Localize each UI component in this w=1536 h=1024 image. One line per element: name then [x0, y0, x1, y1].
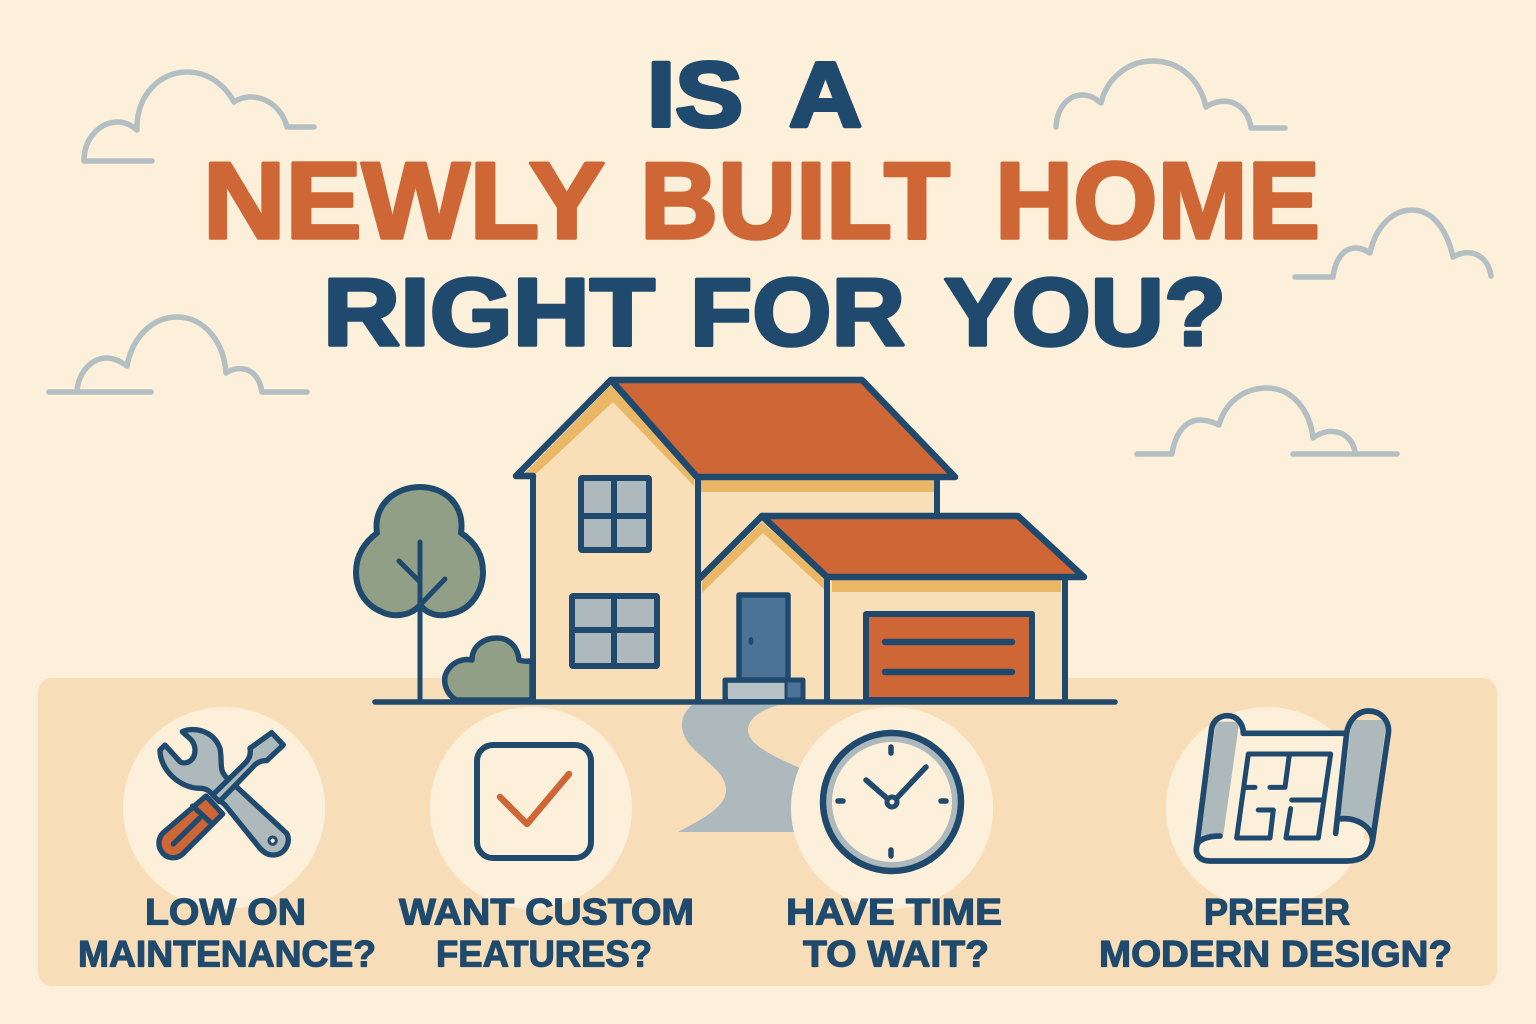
title line 1: IS	[647, 44, 743, 146]
icon: blueprint	[1196, 711, 1389, 861]
icon circles	[123, 707, 1368, 909]
label: have time to wait: TO WAIT?	[803, 934, 989, 974]
label: prefer modern design	[1099, 892, 1452, 974]
screwdriver handle	[159, 796, 223, 858]
wrench	[160, 730, 288, 855]
label: low on maintenance: MAINTENANCE?	[78, 934, 376, 974]
title	[203, 44, 1320, 366]
panel: ground band	[38, 678, 1497, 986]
steps	[725, 680, 803, 700]
title line 2: BUILT	[640, 140, 950, 262]
lower window	[572, 596, 657, 666]
title line 2: HOME	[995, 140, 1320, 262]
icon: checkbox	[477, 745, 591, 858]
icon: clock	[823, 733, 961, 871]
icon: wrench and screwdriver	[159, 730, 288, 858]
label: have time to wait	[786, 892, 1002, 974]
garage door	[866, 614, 1032, 700]
label: want custom features: WANT CUSTOM	[399, 892, 694, 932]
title line 1	[647, 44, 862, 146]
upper window	[581, 478, 649, 550]
ground line	[375, 699, 1115, 705]
label: have time to wait: HAVE TIME	[786, 892, 1002, 932]
label: prefer modern design: PREFER	[1204, 892, 1350, 932]
garage walls	[701, 520, 1065, 700]
title line 1: A	[789, 44, 862, 146]
door	[739, 595, 788, 680]
clouds	[49, 61, 1491, 454]
label: low on maintenance: LOW ON	[145, 892, 306, 932]
label: prefer modern design: MODERN DESIGN?	[1099, 934, 1452, 974]
title line 3	[323, 259, 1226, 366]
screwdriver blade	[213, 733, 283, 802]
label: want custom features: FEATURES?	[436, 934, 652, 974]
garage roof	[700, 516, 1084, 700]
bush	[445, 638, 532, 700]
title line 3: RIGHT	[323, 259, 655, 366]
tree	[356, 487, 483, 702]
driveway path	[678, 705, 800, 832]
title line 2	[203, 140, 1320, 262]
house	[516, 380, 1084, 700]
title line 2: NEWLY	[203, 140, 605, 262]
label: want custom features	[399, 892, 694, 974]
upper house walls	[523, 385, 937, 700]
main roof	[516, 380, 955, 700]
title line 3: FOR	[690, 259, 905, 366]
label: low on maintenance	[78, 892, 376, 974]
title line 3: YOU?	[944, 259, 1226, 366]
